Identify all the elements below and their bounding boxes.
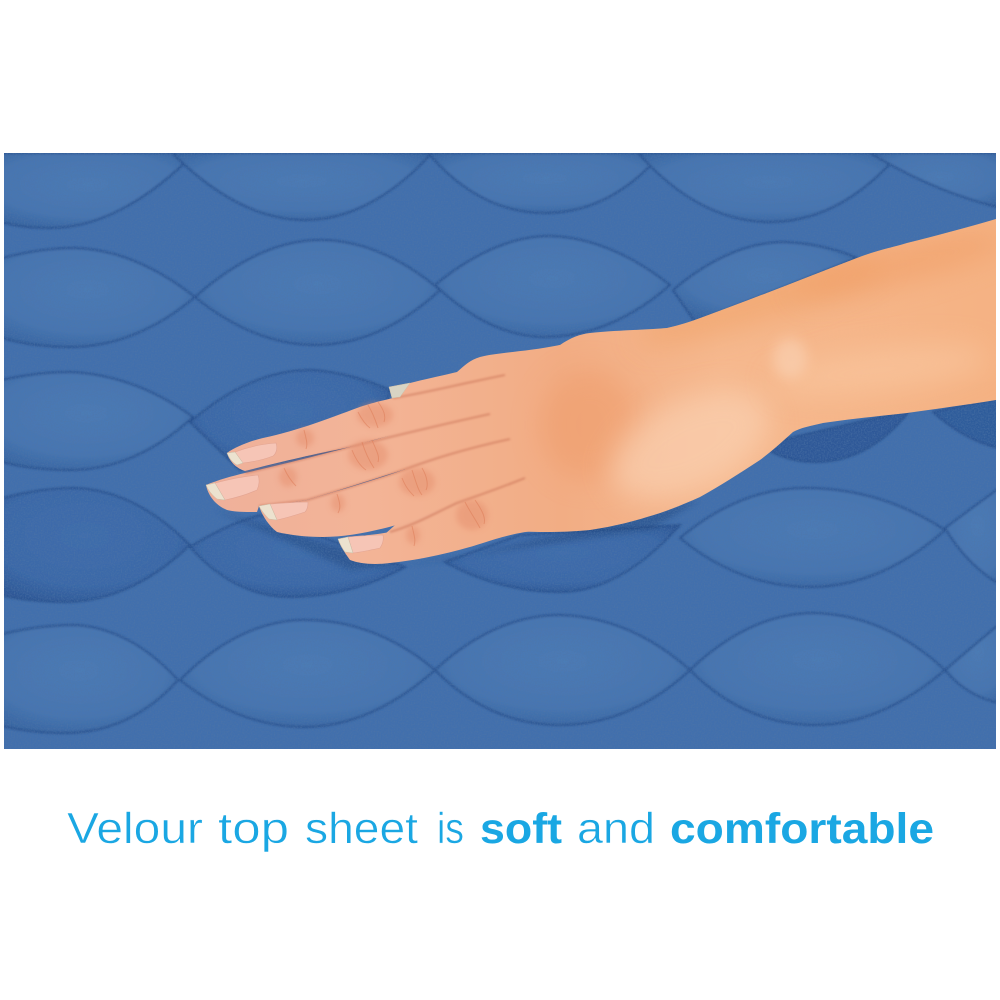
hand resting on the sheet [206, 219, 1000, 564]
caption: sheet [305, 804, 418, 853]
hand shadow [235, 502, 692, 570]
velour grain [4, 153, 996, 749]
caption: is [437, 804, 464, 853]
skin filling the gaps between fingers [340, 408, 490, 534]
caption: soft [480, 805, 562, 853]
ring finger [259, 430, 560, 537]
caption: and [577, 804, 655, 853]
fingernails [206, 383, 410, 553]
wrist bone highlight [773, 338, 807, 378]
caption [67, 804, 934, 853]
fourth finger [338, 460, 600, 564]
skin shading on back of hand and arm [542, 231, 992, 504]
little finger [389, 345, 560, 400]
hand and arm [405, 219, 996, 532]
photo: quilted velour sheet [0, 153, 1000, 749]
nail beds [215, 443, 383, 553]
index finger [227, 365, 560, 471]
caption: Velour [67, 804, 203, 853]
middle finger [206, 400, 560, 512]
knuckles [279, 403, 488, 544]
caption: top [218, 804, 289, 853]
nail tips [206, 383, 410, 553]
finger separations [245, 375, 525, 532]
knuckle creases [284, 402, 485, 546]
caption: comfortable [670, 805, 934, 853]
quilted lens pattern [0, 153, 1000, 733]
